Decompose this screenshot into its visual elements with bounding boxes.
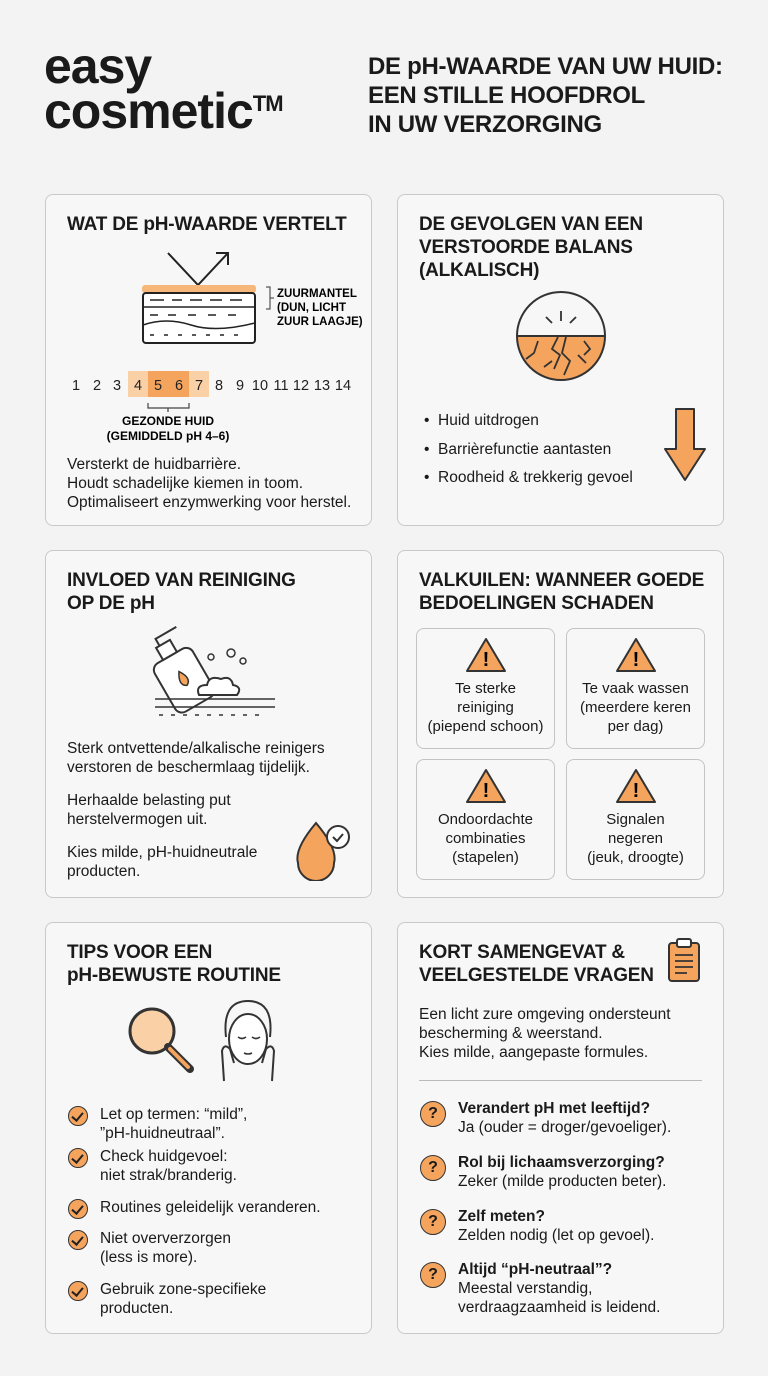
pH scale: 10 bbox=[252, 378, 268, 394]
pH scale: 2 bbox=[93, 378, 101, 394]
title: IN UW VERZORGING bbox=[368, 111, 602, 138]
list: • Huid uitdrogen bbox=[424, 412, 539, 429]
panel: reiniging: producten. bbox=[67, 863, 140, 880]
heading: KORT SAMENGEVAT & bbox=[419, 942, 625, 963]
pH scale: 13 bbox=[314, 378, 330, 394]
panel: gevolgen bbox=[397, 194, 724, 526]
skin diagram: ZUUR LAAGJE) bbox=[277, 316, 363, 328]
panel: reiniging: Kies milde, pH-huidneutrale bbox=[67, 844, 257, 861]
faq: Ja (ouder = droger/gevoeliger). bbox=[458, 1119, 671, 1136]
pH scale: GEZONDE HUID bbox=[122, 414, 214, 428]
list bbox=[424, 412, 633, 486]
heading bbox=[67, 942, 281, 986]
heading: VALKUILEN: WANNEER GOEDE bbox=[419, 570, 704, 591]
text block: Houdt schadelijke kiemen in toom. bbox=[67, 475, 303, 492]
panel: tips: (less is more). bbox=[100, 1249, 197, 1266]
panel: samenvatting: Zelden nodig (let op gevoel). bbox=[458, 1227, 654, 1244]
title: EEN STILLE HOOFDROL bbox=[368, 82, 645, 109]
summary text: Kies milde, aangepaste formules. bbox=[419, 1044, 648, 1061]
card: signalen bbox=[566, 759, 705, 880]
card: te sterke reiniging: (piepend schoon) bbox=[428, 718, 543, 735]
checklist bbox=[68, 1106, 247, 1142]
icon: magnifier bbox=[128, 1008, 194, 1073]
panel: tips bbox=[45, 922, 372, 1334]
heading: TIPS VOOR EEN bbox=[67, 942, 212, 963]
skin diagram: ZUURMANTEL bbox=[277, 288, 357, 300]
heading bbox=[67, 570, 296, 614]
panel: samenvatting: ? bbox=[428, 1159, 438, 1176]
faq: ? bbox=[428, 1105, 438, 1122]
panel: tips: Check huidgevoel: bbox=[100, 1148, 228, 1165]
list: • Barrièrefunctie aantasten bbox=[424, 440, 611, 458]
pH scale: 4 bbox=[134, 378, 142, 394]
panel: reiniging bbox=[45, 550, 372, 898]
icon: cracked skin bbox=[516, 291, 606, 381]
icon: face bbox=[221, 1000, 275, 1082]
faq: Verandert pH met leeftijd? bbox=[458, 1100, 650, 1117]
text block: verstoren de beschermlaag tijdelijk. bbox=[67, 759, 310, 776]
card: signalen: Signalen bbox=[606, 811, 665, 828]
skin diagram: (DUN, LICHT bbox=[277, 302, 346, 314]
heading: pH-BEWUSTE ROUTINE bbox=[67, 965, 281, 986]
card: te sterke reiniging bbox=[416, 628, 555, 749]
card: combinaties bbox=[416, 759, 555, 880]
card: te vaak wassen: Te vaak wassen bbox=[582, 680, 689, 697]
logo: cosmeticTM bbox=[44, 83, 283, 139]
text block: Versterkt de huidbarrière. bbox=[67, 456, 241, 473]
checklist: ”pH-huidneutraal”. bbox=[100, 1125, 225, 1142]
heading: (ALKALISCH) bbox=[419, 260, 539, 281]
icon: clipboard bbox=[668, 938, 700, 982]
icon: cleanser bbox=[152, 626, 275, 716]
icon: drop check bbox=[296, 822, 350, 881]
pH scale: 14 bbox=[335, 378, 351, 394]
pH scale bbox=[72, 371, 351, 443]
summary text: bescherming & weerstand. bbox=[419, 1025, 603, 1042]
card: te vaak wassen bbox=[566, 628, 705, 749]
title bbox=[368, 53, 723, 138]
heading: BEDOELINGEN SCHADEN bbox=[419, 593, 654, 614]
logo bbox=[44, 38, 283, 139]
panel: samenvatting: ? bbox=[428, 1213, 438, 1230]
panel: valkuilen bbox=[397, 550, 724, 898]
card: combinaties: ! bbox=[482, 780, 489, 802]
summary text: Een licht zure omgeving ondersteunt bbox=[419, 1006, 671, 1023]
panel: tips: Routines geleidelijk veranderen. bbox=[100, 1199, 321, 1216]
heading: VEELGESTELDE VRAGEN bbox=[419, 965, 654, 986]
pH scale: 8 bbox=[215, 378, 223, 394]
text block bbox=[67, 456, 351, 511]
card: combinaties: (stapelen) bbox=[452, 849, 519, 866]
card: te sterke reiniging: reiniging bbox=[457, 699, 514, 716]
heading: VERSTOORDE BALANS bbox=[419, 237, 633, 258]
panel: samenvatting bbox=[397, 922, 724, 1334]
skin diagram bbox=[142, 252, 363, 344]
text block bbox=[67, 740, 325, 776]
panel: tips: producten. bbox=[100, 1300, 173, 1317]
panel: reiniging: herstelvermogen uit. bbox=[67, 811, 207, 828]
panel: samenvatting: Zeker (milde producten beter). bbox=[458, 1173, 666, 1190]
text block: Optimaliseert enzymwerking voor herstel. bbox=[67, 494, 351, 511]
panel: tips: Niet oververzorgen bbox=[100, 1230, 231, 1247]
panel: samenvatting: verdraagzaamheid is leidend. bbox=[458, 1299, 660, 1316]
card: signalen: (jeuk, droogte) bbox=[587, 849, 684, 866]
summary text bbox=[419, 1006, 671, 1061]
text block: Sterk ontvettende/alkalische reinigers bbox=[67, 740, 325, 757]
list: • Roodheid & trekkerig gevoel bbox=[424, 469, 633, 486]
card: signalen: negeren bbox=[608, 830, 663, 847]
logo: easy bbox=[44, 38, 151, 94]
icon: down arrow bbox=[664, 408, 706, 481]
pH scale: 5 bbox=[154, 378, 162, 394]
heading: INVLOED VAN REINIGING bbox=[67, 570, 296, 591]
heading bbox=[419, 570, 704, 614]
panel: samenvatting: Zelf meten? bbox=[458, 1208, 545, 1225]
panel: tips: Gebruik zone-specifieke bbox=[100, 1281, 266, 1298]
card: combinaties: combinaties bbox=[445, 830, 526, 847]
pH scale: 6 bbox=[175, 378, 183, 394]
heading: OP DE pH bbox=[67, 593, 155, 614]
panel: pH-waarde bbox=[45, 194, 372, 526]
pH scale: 12 bbox=[293, 378, 309, 394]
panel: tips: niet strak/branderig. bbox=[100, 1167, 237, 1184]
heading: WAT DE pH-WAARDE VERTELT bbox=[67, 214, 346, 235]
faq bbox=[420, 1100, 671, 1136]
card: combinaties: Ondoordachte bbox=[438, 811, 533, 828]
panel: reiniging: Herhaalde belasting put bbox=[67, 792, 231, 809]
pH scale: 11 bbox=[273, 378, 289, 394]
panel: samenvatting: Meestal verstandig, bbox=[458, 1280, 592, 1297]
card: te vaak wassen: per dag) bbox=[608, 718, 663, 735]
panel: samenvatting: Altijd “pH-neutraal”? bbox=[458, 1261, 612, 1278]
heading bbox=[419, 214, 643, 281]
pH scale: 9 bbox=[236, 378, 244, 394]
heading: DE GEVOLGEN VAN EEN bbox=[419, 214, 643, 235]
card: te vaak wassen: (meerdere keren bbox=[580, 699, 691, 716]
card: te sterke reiniging: ! bbox=[482, 649, 489, 671]
card: signalen: ! bbox=[632, 780, 639, 802]
panel: samenvatting: Rol bij lichaamsverzorging? bbox=[458, 1154, 665, 1171]
card: te vaak wassen: ! bbox=[632, 649, 639, 671]
card: te sterke reiniging: Te sterke bbox=[455, 680, 516, 697]
pH scale: 3 bbox=[113, 378, 121, 394]
pH scale: 1 bbox=[72, 378, 80, 394]
pH scale: 7 bbox=[195, 378, 203, 394]
checklist: Let op termen: “mild”, bbox=[100, 1106, 247, 1123]
heading bbox=[419, 942, 654, 986]
pH scale: (GEMIDDELD pH 4–6) bbox=[107, 429, 229, 443]
title: DE pH-WAARDE VAN UW HUID: bbox=[368, 53, 723, 80]
panel: samenvatting: ? bbox=[428, 1266, 438, 1283]
